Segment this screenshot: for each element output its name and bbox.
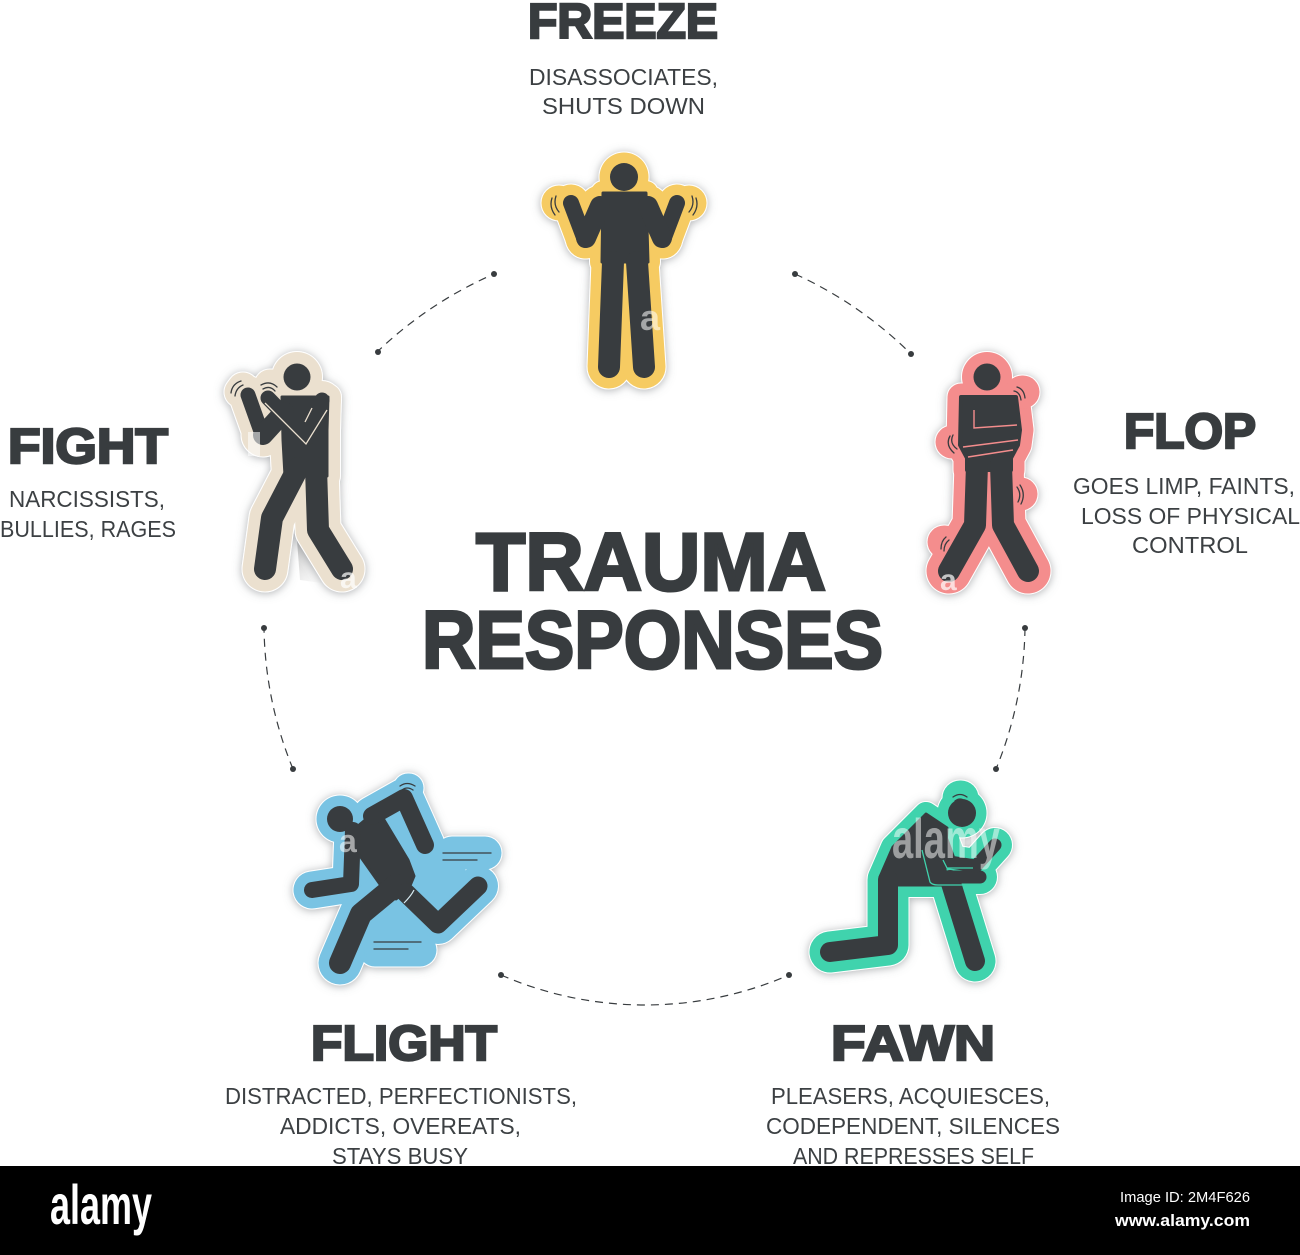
text block: fawn (766, 1017, 1060, 1169)
icon: flop figure on pink sticker (940, 377, 1028, 597)
title (422, 517, 883, 686)
dashed connector: flight to fight (261, 625, 296, 772)
text block: freeze: SHUTS DOWN (542, 93, 705, 119)
text block: fawn: FAWN (831, 1017, 995, 1071)
text block: flight: FLIGHT (311, 1017, 497, 1071)
text block: fight: FIGHT (8, 420, 168, 474)
text block: flight: DISTRACTED, PERFECTIONISTS, (225, 1083, 577, 1109)
footer image id: Image ID: 2M4F626 (1120, 1189, 1250, 1206)
icon: flop figure on pink sticker: a (940, 564, 957, 597)
title: RESPONSES (422, 595, 883, 686)
icon: fight figure on beige sticker (231, 377, 357, 595)
text block: fawn: CODEPENDENT, SILENCES (766, 1113, 1060, 1139)
footer logo: alamy (50, 1173, 152, 1236)
text block: fight: NARCISSISTS, (9, 486, 165, 512)
footer band (0, 1166, 1300, 1255)
dashed connector: fawn to flight (498, 972, 792, 1005)
text block: flop: CONTROL (1132, 532, 1248, 558)
icon: fight figure on beige sticker: a (340, 562, 357, 595)
text block: fight: BULLIES, RAGES (0, 516, 176, 542)
text block: flop (1073, 405, 1300, 558)
text block: freeze: DISASSOCIATES, (529, 64, 718, 90)
icon: fawn figure on green sticker (830, 794, 1000, 961)
text block: flop: FLOP (1124, 405, 1256, 459)
icon: freeze figure on yellow sticker: a (640, 297, 661, 338)
dashed connector: flop to fawn (993, 625, 1028, 772)
text block: flight: STAYS BUSY (332, 1143, 468, 1169)
text block: fawn: AND REPRESSES SELF (793, 1143, 1034, 1169)
text block: freeze (528, 0, 718, 119)
dashed connector: freeze to flop (792, 271, 914, 357)
text block: flop: GOES LIMP, FAINTS, (1073, 473, 1295, 499)
dashed connector: fight to freeze (375, 271, 497, 355)
icon: fawn figure on green sticker: alamy (892, 807, 1000, 870)
title: TRAUMA (476, 517, 826, 608)
icon: flight figure on blue sticker (312, 784, 491, 963)
text block: flop: LOSS OF PHYSICAL (1081, 503, 1300, 529)
icon: freeze figure on yellow sticker (551, 177, 697, 367)
text block: fawn: PLEASERS, ACQUIESCES, (771, 1083, 1050, 1109)
text block: fight (0, 420, 176, 542)
text block: flight (225, 1017, 577, 1169)
text block: flight: ADDICTS, OVEREATS, (280, 1113, 521, 1139)
icon: flight figure on blue sticker: a (339, 823, 357, 859)
footer url: www.alamy.com (1114, 1211, 1250, 1230)
